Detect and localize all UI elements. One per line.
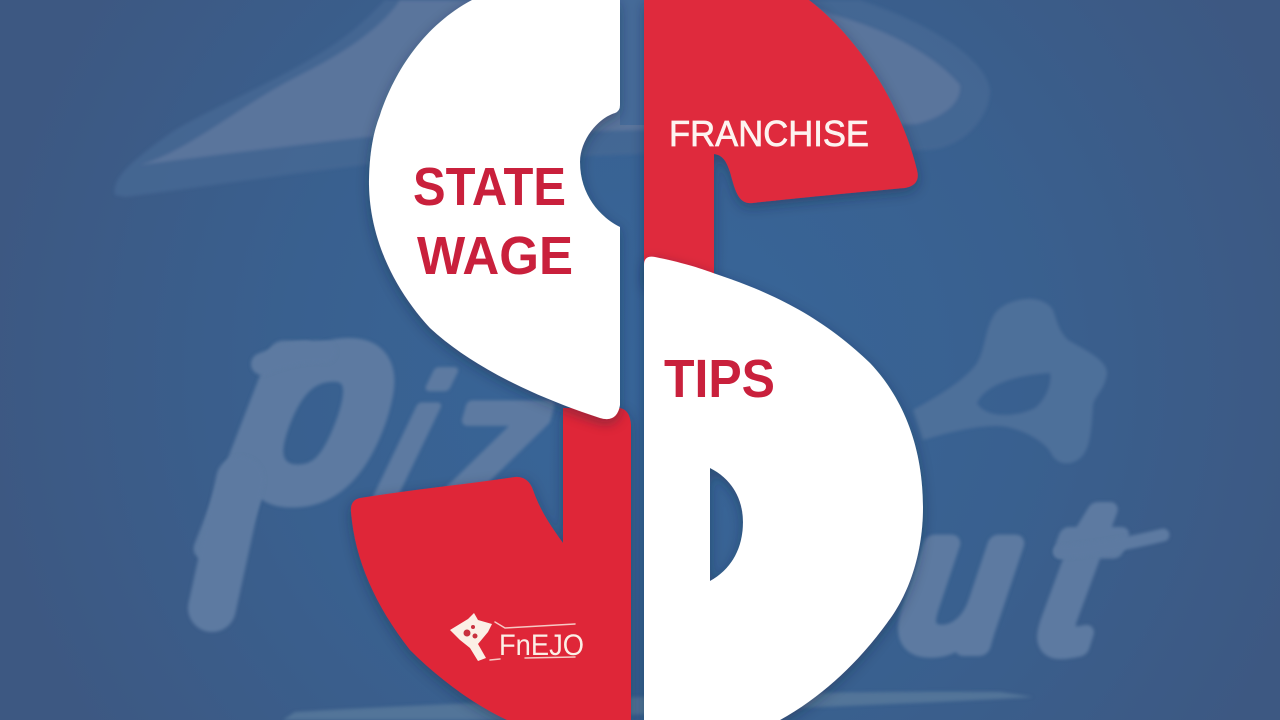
watermark: logo lettering xyxy=(205,256,1134,694)
letter z: z xyxy=(433,331,559,555)
emblem spots xyxy=(464,625,478,638)
letter i: i xyxy=(361,339,463,540)
watermark: t crossbar swash xyxy=(1060,535,1163,552)
label: state: STATE xyxy=(413,157,566,217)
watermark: roof logo xyxy=(115,0,990,197)
red upper section xyxy=(644,0,918,285)
letter p: p xyxy=(205,256,416,549)
letter t: t xyxy=(1026,457,1134,694)
label: tips: TIPS xyxy=(664,349,775,409)
gap tint behind the centre xyxy=(620,0,644,125)
letter u: u xyxy=(891,472,1028,687)
dollar sign xyxy=(351,0,923,720)
watermark: bottom underline xyxy=(283,692,1033,720)
logo emblem xyxy=(450,613,492,661)
watermark: p swash xyxy=(262,352,325,364)
label: franchise: FRANCHISE xyxy=(669,113,869,154)
watermark: star shape xyxy=(913,299,1107,463)
icon: small distorted logo xyxy=(450,613,584,662)
logo wordmark: FnEJO xyxy=(499,629,584,662)
watermark: p descender stroke xyxy=(212,480,240,608)
label: wage: WAGE xyxy=(417,226,573,286)
white upper section xyxy=(369,0,620,419)
wordmark scratches xyxy=(490,622,575,660)
white lower section xyxy=(644,257,923,720)
red lower section xyxy=(351,408,631,720)
